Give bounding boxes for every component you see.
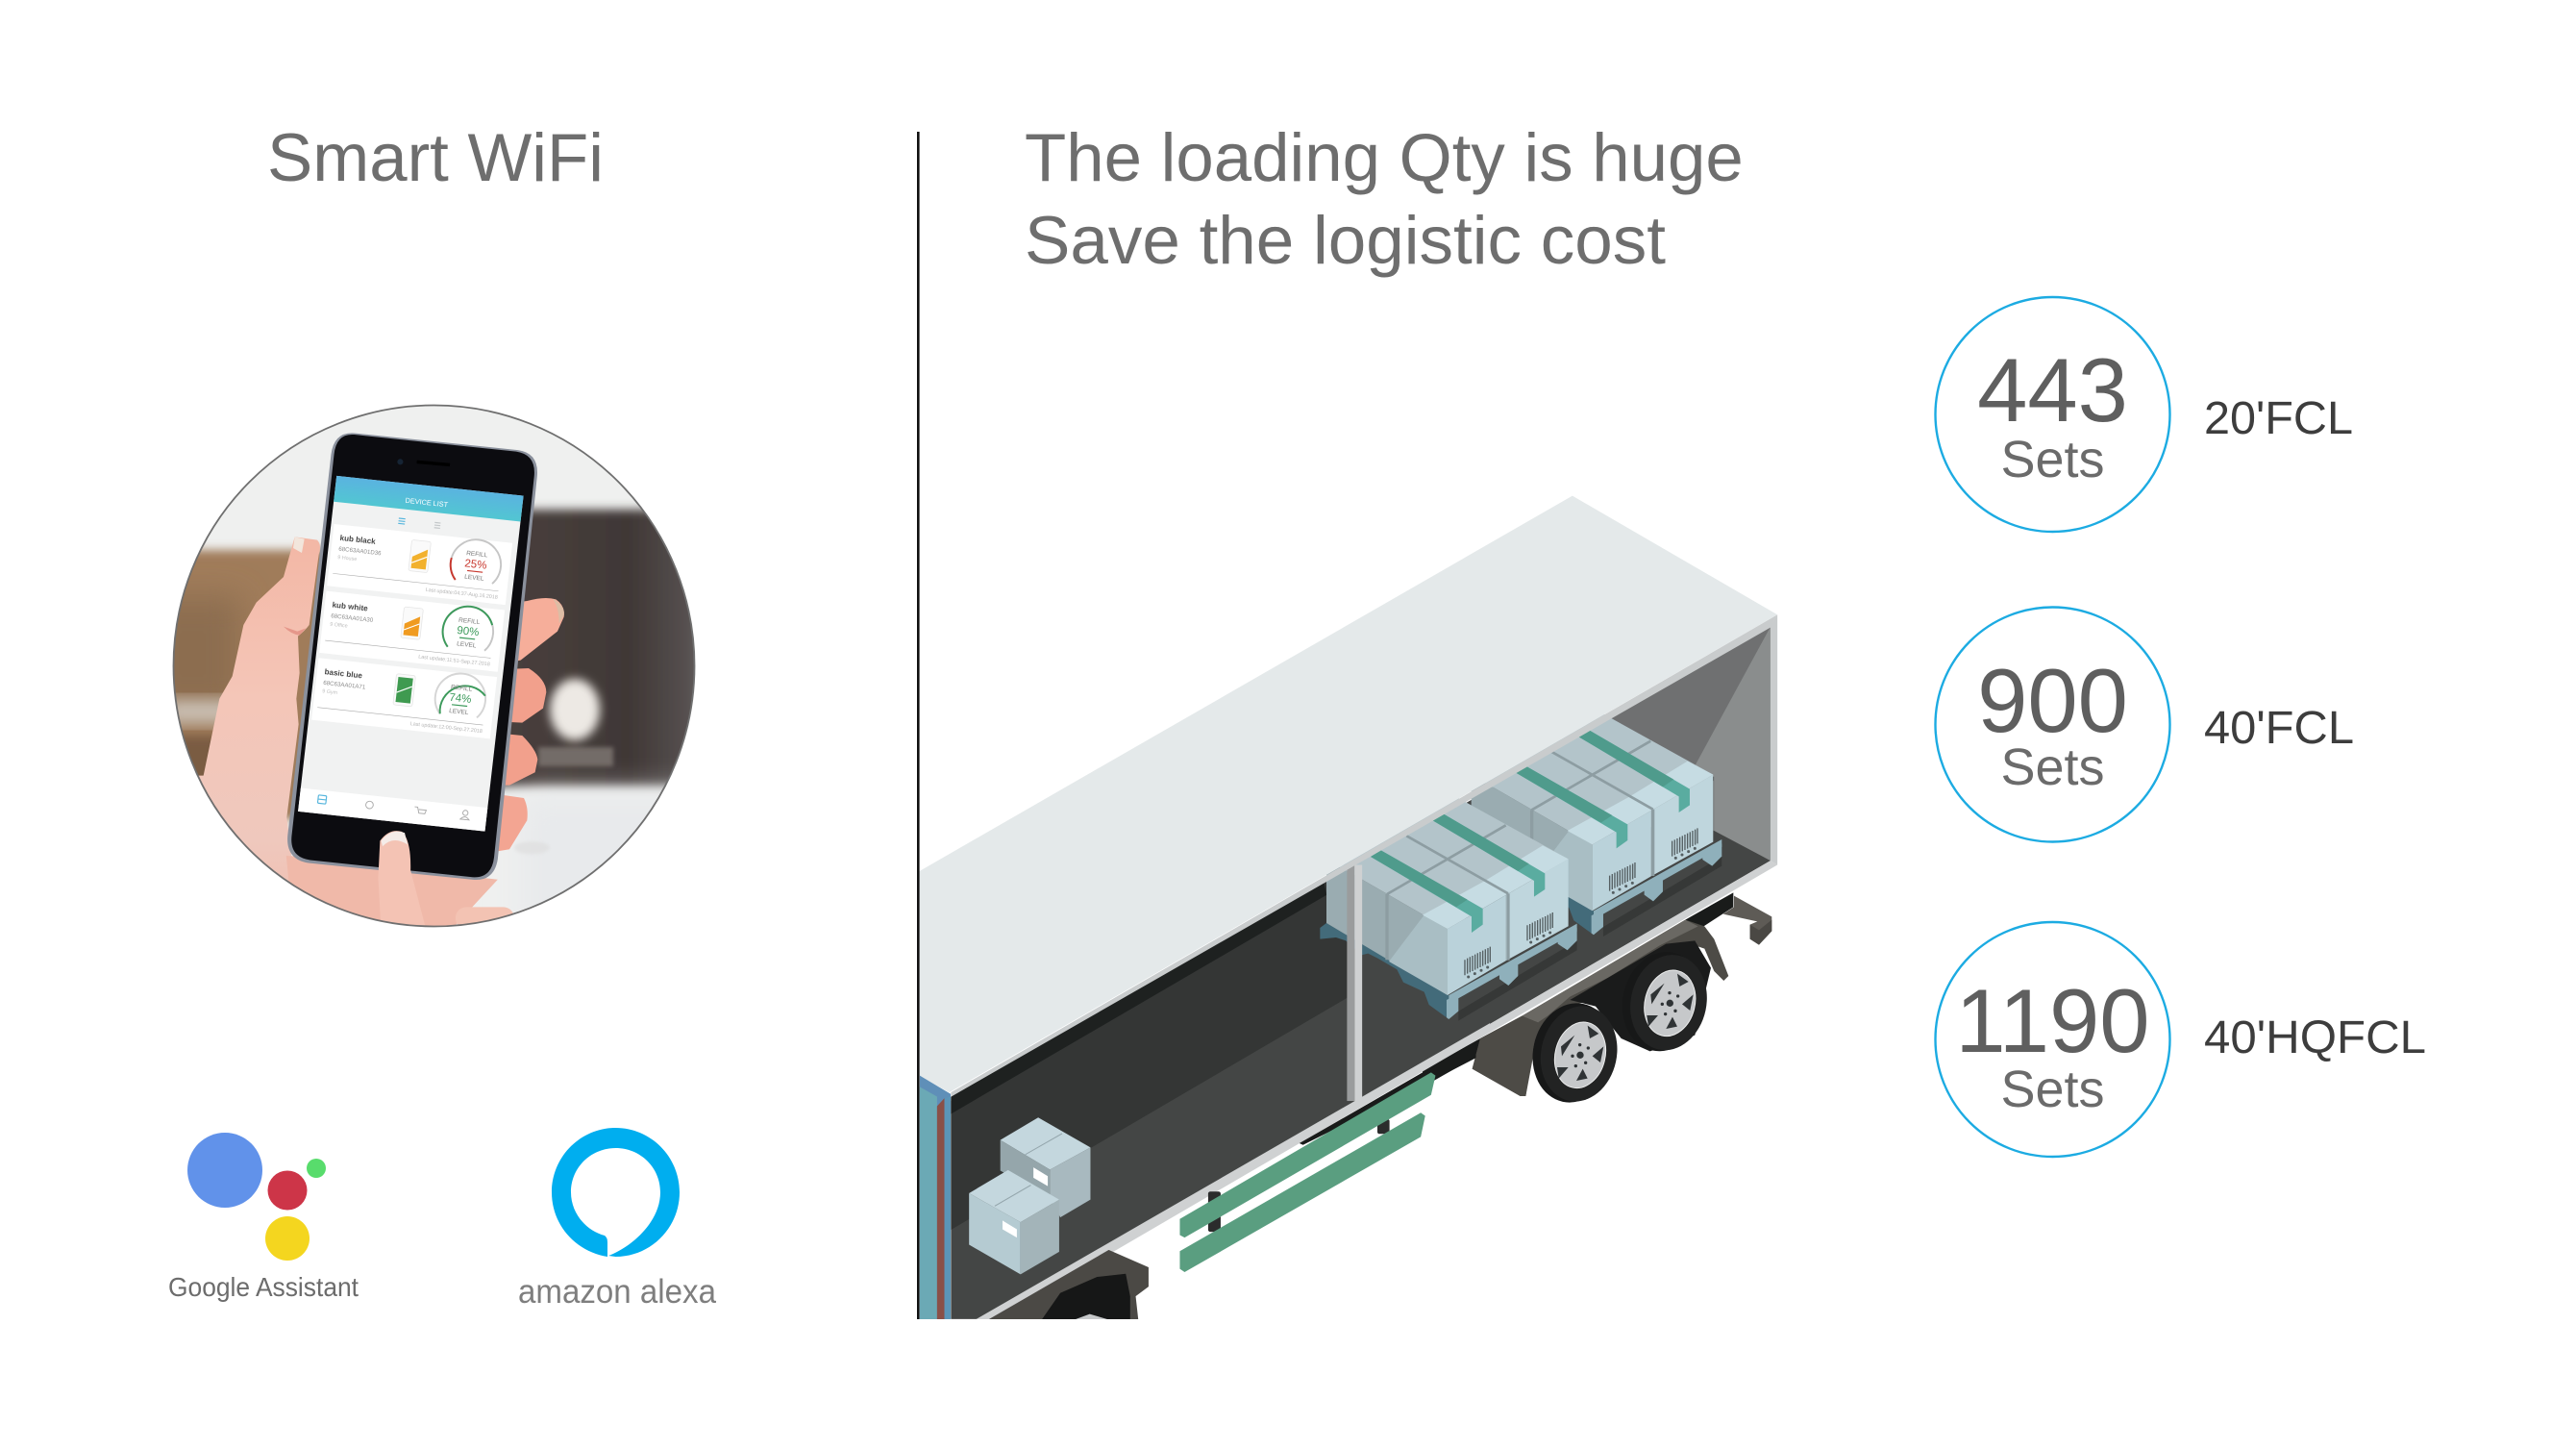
device row: kub white: 90% <box>457 625 480 638</box>
stat: 1190 sets 40'HQFCL: Sets <box>2000 1061 2105 1118</box>
stat: 443 sets 20'FCL: Sets <box>2000 431 2105 488</box>
front wheel <box>1532 1003 1617 1103</box>
icon: Google Assistant dots <box>187 1133 326 1261</box>
text: amazon alexa: amazon alexa <box>518 1273 716 1311</box>
icon: Alexa speech ring <box>552 1128 680 1257</box>
trailer roof <box>913 496 1777 1092</box>
device row: kub black: 9 House <box>337 555 358 562</box>
text: Google Assistant: Google Assistant <box>168 1272 359 1302</box>
device row: kub black: 68C63AA01D36 <box>338 546 382 557</box>
device row: basic blue: 68C63AA01A71 <box>323 680 366 691</box>
lower sill <box>1109 861 1777 1252</box>
device row: kub black: LEVEL <box>464 574 484 583</box>
stat: 900 sets 40'FCL: 40'FCL <box>2204 703 2354 754</box>
stat: 443 sets 20'FCL: 443 <box>1977 339 2128 440</box>
lower hub fragment <box>1075 1314 1108 1319</box>
device row: basic blue: LEVEL <box>449 708 469 716</box>
device row: kub black <box>327 524 512 605</box>
device row: basic blue: basic blue <box>324 667 363 680</box>
tow hook <box>1723 896 1771 945</box>
stat: 900 sets 40'FCL: Sets <box>2000 738 2105 796</box>
pallet stack: rear <box>1465 707 1721 937</box>
device row: kub white: 68C63AA01A30 <box>331 612 374 624</box>
photo: hand holding smartphone <box>174 406 694 926</box>
title: Smart WiFi: Smart WiFi <box>267 120 604 196</box>
stat: 900 sets 40'FCL <box>1936 608 2354 842</box>
stat: 900 sets 40'FCL: 900 <box>1977 650 2128 751</box>
front wheel fender lower <box>983 1250 1149 1319</box>
smartphone body <box>287 433 537 880</box>
small box: rear <box>1001 1117 1090 1217</box>
stat: 1190 sets 40'HQFCL: 40'HQFCL <box>2204 1012 2426 1063</box>
stat: 443 sets 20'FCL: 20'FCL <box>2204 393 2353 444</box>
phone screen: DEVICE LIST <box>405 496 449 509</box>
photo circle outline <box>173 406 694 927</box>
device row: kub white: REFILL <box>458 617 481 626</box>
device row: kub white: LEVEL <box>457 640 477 650</box>
pallet stacks <box>1320 707 1721 1021</box>
rear wheel <box>1644 969 1707 1052</box>
hand <box>198 537 320 881</box>
trailer interior <box>951 627 1771 1319</box>
trailer interior floor <box>951 627 1771 1319</box>
device row: basic blue: REFILL <box>451 684 473 693</box>
palm below phone <box>286 856 514 929</box>
device row: basic blue: 9 Gym <box>322 688 338 696</box>
lower sill front <box>976 1023 1490 1319</box>
trailer end wall light <box>1695 627 1771 861</box>
side guard rail: lower <box>1179 1112 1425 1272</box>
divider line <box>917 132 920 1319</box>
device row: basic blue <box>311 658 497 738</box>
wheel fender <box>1473 920 1728 1096</box>
side guard rail: upper <box>1179 1072 1435 1237</box>
thin underframe shadow <box>1300 1042 1476 1145</box>
illustration: isometric truck with boxes <box>913 496 1777 1328</box>
phone screen <box>298 476 524 832</box>
thumb pressing home button <box>379 831 425 925</box>
fingers <box>498 598 564 853</box>
lower front tire <box>1042 1274 1130 1319</box>
truck underframe <box>1423 892 1733 1087</box>
title: loading quantity: The loading Qty is huge <box>1025 120 1744 196</box>
device row: kub white: 9 Office <box>330 622 348 630</box>
logo: Amazon Alexa <box>518 1128 716 1311</box>
roof trim <box>951 614 1777 1097</box>
device row: kub white: Last update:11:51-Sep.27.2018 <box>418 655 490 667</box>
stat: 1190 sets 40'HQFCL: 1190 <box>1955 970 2150 1071</box>
right post <box>1771 614 1777 865</box>
side guard brackets <box>1208 1119 1390 1232</box>
running gear <box>1423 892 1771 1111</box>
title: loading quantity: Save the logistic cost <box>1025 203 1666 279</box>
trailer left dark wall <box>951 876 1347 1230</box>
device row: kub white <box>319 591 505 672</box>
center pillar <box>1347 865 1362 1101</box>
stat: 443 sets 20'FCL <box>1936 297 2353 532</box>
small box: front <box>969 1170 1059 1274</box>
device row: kub black: 25% <box>464 558 487 572</box>
device row: kub black: kub black <box>339 534 377 546</box>
wheel well <box>1570 940 1711 1051</box>
blue trailer corner <box>920 1076 951 1319</box>
device row: kub black: Last update:04:37-Aug.16.2018 <box>425 587 498 601</box>
wall upper shadow <box>951 882 1326 1113</box>
trailer end wall shaded <box>1600 627 1771 831</box>
device row: basic blue: Last update:12:00-Sep.27.2018 <box>409 721 483 735</box>
phone tab bar <box>298 787 487 832</box>
logo: Google Assistant <box>168 1133 359 1302</box>
device row: kub black: REFILL <box>466 550 488 559</box>
device row: basic blue: 74% <box>449 692 472 706</box>
device row: kub white: kub white <box>332 601 369 613</box>
front fender panel <box>1473 1015 1526 1096</box>
pallet stack: front <box>1320 790 1577 1021</box>
stat: 1190 sets 40'HQFCL <box>1936 922 2426 1157</box>
title: loading quantity <box>1025 120 1744 279</box>
photo background <box>174 406 694 925</box>
